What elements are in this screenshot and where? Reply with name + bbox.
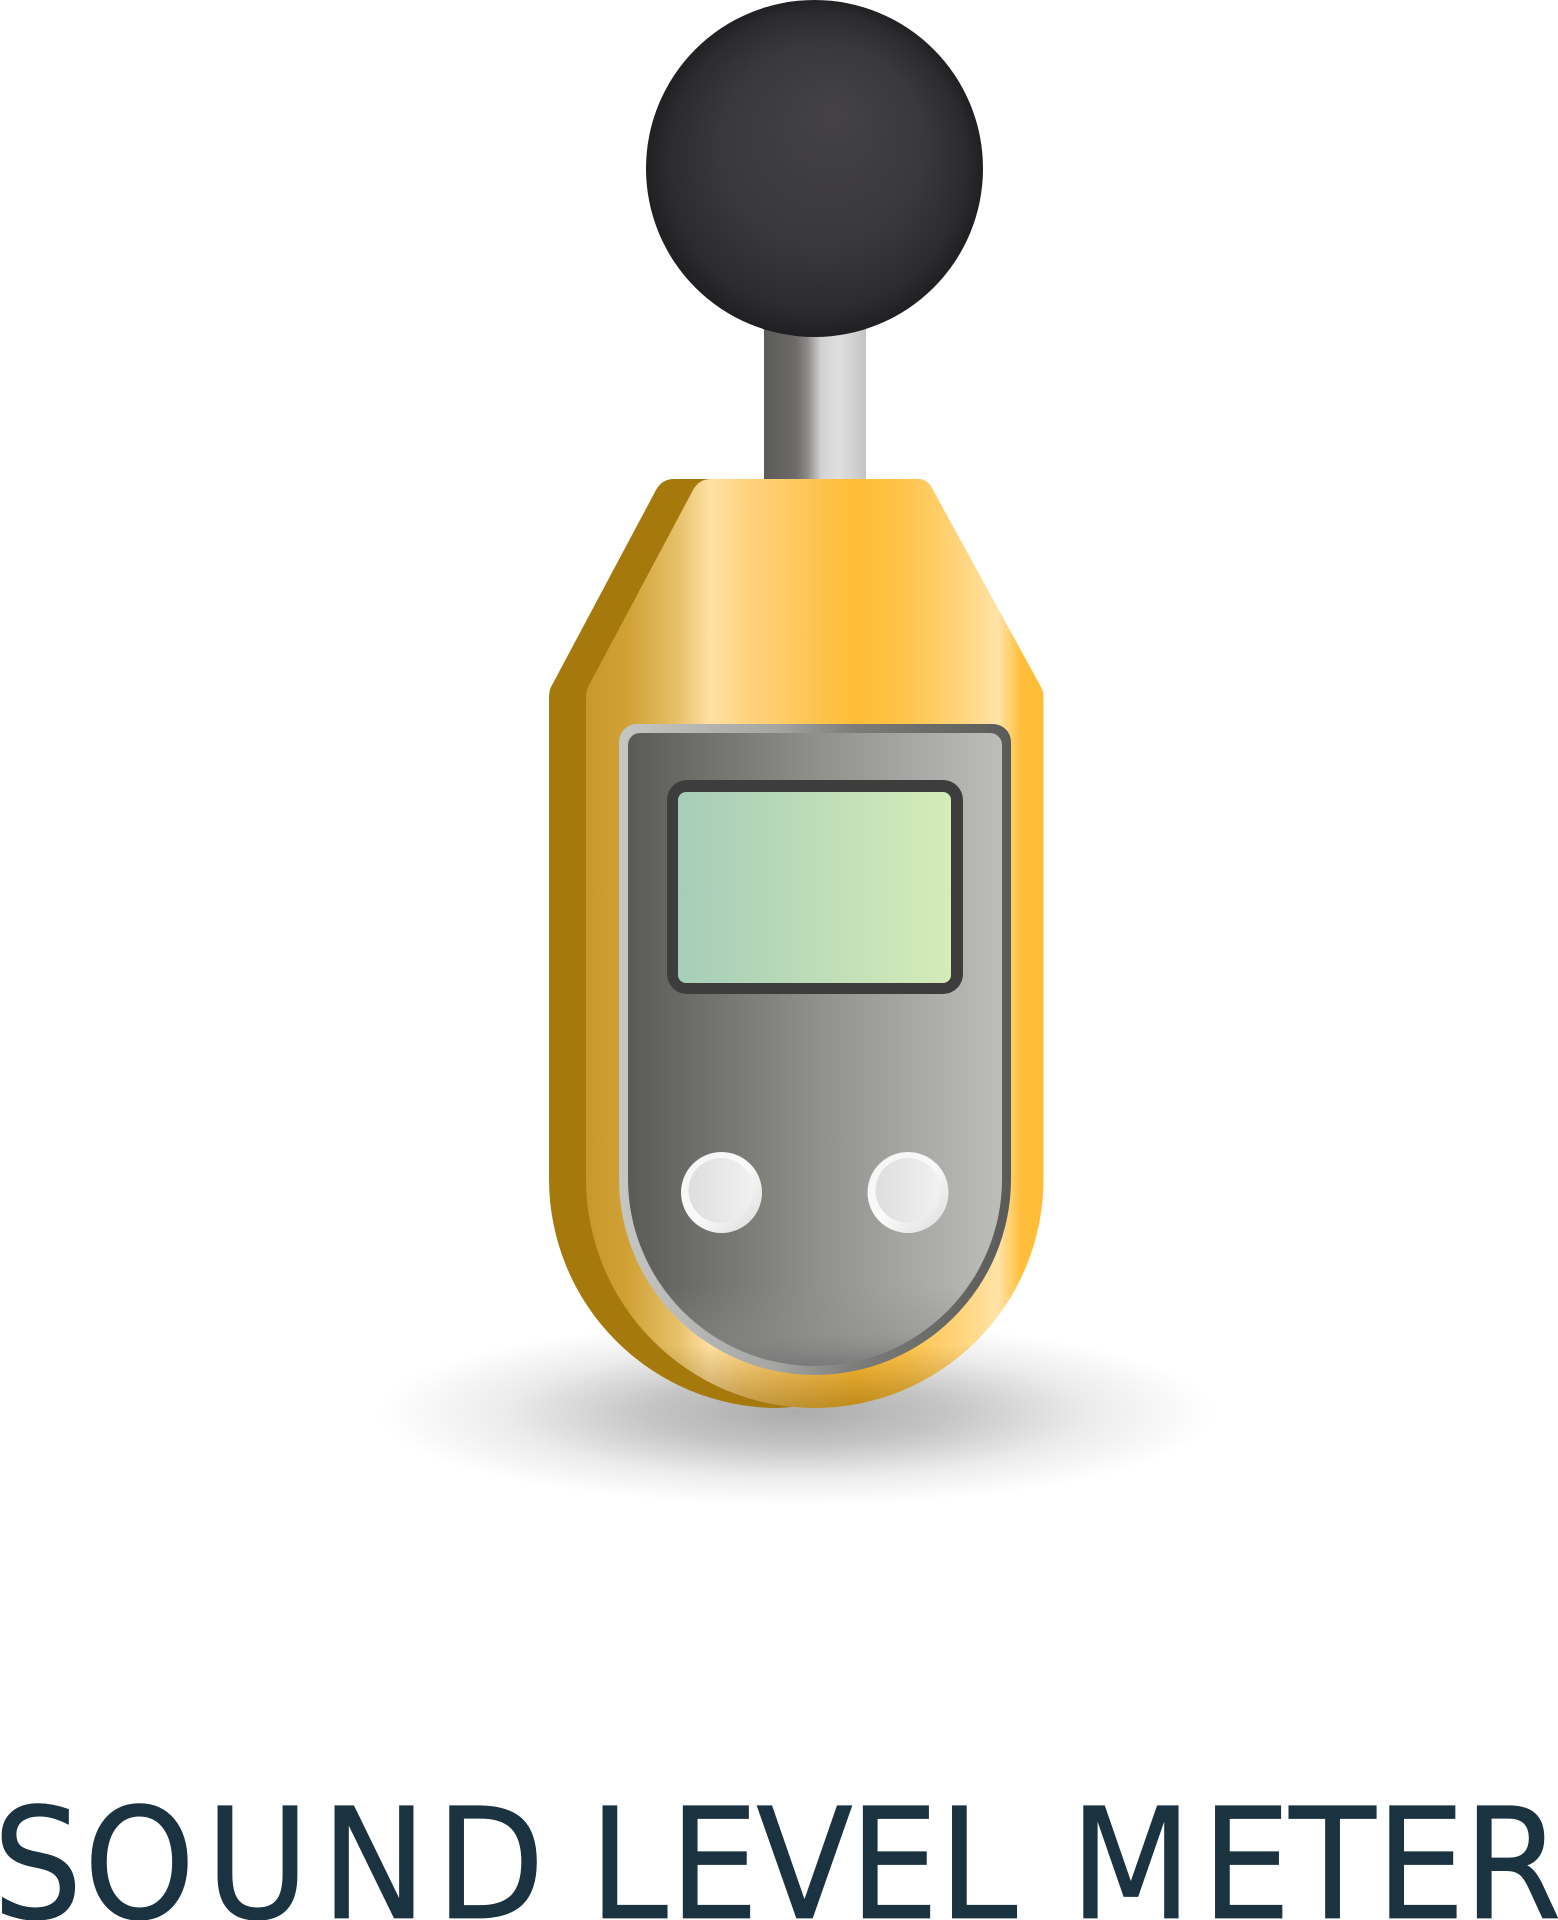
control panel bezel (619, 724, 1011, 1375)
microphone stem (764, 320, 866, 480)
control panel face (628, 733, 1002, 1367)
device body back side (549, 479, 800, 1408)
device body front (586, 479, 1044, 1410)
microphone ball (646, 0, 983, 337)
display screen (667, 780, 963, 994)
icon: sound level meter device (549, 0, 1044, 1410)
right button (868, 1152, 948, 1233)
ground shadow (379, 1321, 1215, 1505)
left button (681, 1152, 762, 1233)
